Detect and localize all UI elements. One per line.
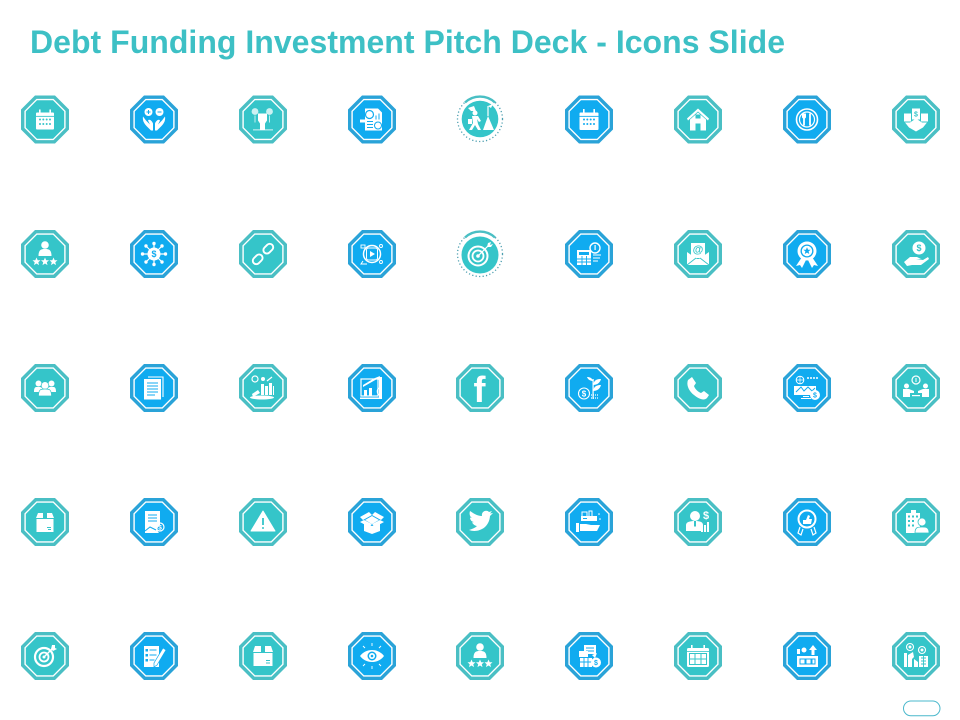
icon: monitor with globe and dollar: $ — [813, 392, 817, 400]
icon: warning triangle — [239, 498, 287, 546]
icon: phone — [674, 364, 722, 412]
icon: facebook — [456, 364, 504, 412]
icon: monitor with globe and dollar — [783, 364, 831, 412]
icon: people with coins — [892, 632, 940, 680]
icon: financial documents with dollar: $ — [594, 660, 598, 667]
icon: documents — [130, 364, 178, 412]
icon: video film reel — [348, 230, 396, 278]
icon: hand with chart — [565, 498, 613, 546]
icon: money handshake: $ — [914, 112, 918, 118]
icon: plant with coin: $ — [582, 390, 587, 398]
icon: box with upward arrows — [783, 632, 831, 680]
icon: chart board with trend arrow — [348, 364, 396, 412]
icon: package box — [239, 632, 287, 680]
icon: calendar — [21, 96, 69, 144]
icon: plant with coin — [565, 364, 613, 412]
icon: email envelope with at sign: @ — [693, 244, 704, 256]
icon: dollar virus network: $ — [151, 249, 157, 259]
icon: businessman with dollar and bars: $ — [703, 510, 709, 522]
icon: twitter bird — [456, 498, 504, 546]
icon: businessman with dollar and bars — [674, 498, 722, 546]
icon: raised fist with balloons — [239, 96, 287, 144]
icon: eye — [348, 632, 396, 680]
icon: calendar grid — [674, 632, 722, 680]
icon: hand holding dollar coin — [892, 230, 940, 278]
icon: house — [674, 96, 722, 144]
icon: group of people — [21, 364, 69, 412]
icon: calendar — [565, 96, 613, 144]
icon: target with arrow — [21, 632, 69, 680]
icon: report with charts — [348, 96, 396, 144]
icon: open box — [348, 498, 396, 546]
icon: award badge with star — [783, 230, 831, 278]
icon: climber on mountain with flags — [458, 96, 502, 142]
icon: growth bars with coin — [239, 364, 287, 412]
icon: cutlery in circle — [783, 96, 831, 144]
icon: calculator and clock — [565, 230, 613, 278]
icon: email envelope with at sign — [674, 230, 722, 278]
icon: money handshake — [892, 96, 940, 144]
icon: document with dollar — [130, 498, 178, 546]
icon: facebook: f — [474, 369, 486, 410]
icon: financial documents with dollar — [565, 632, 613, 680]
icon: package box — [21, 498, 69, 546]
icon: hands with plus and minus — [130, 96, 178, 144]
icon: award badge with thumbs up — [783, 498, 831, 546]
icon: office building with person — [892, 498, 940, 546]
icon: document with dollar: $ — [158, 524, 162, 532]
icon: person with three stars — [456, 632, 504, 680]
icon: meeting with coin — [892, 364, 940, 412]
icon: broken chain link — [239, 230, 287, 278]
icon: person with three stars — [21, 230, 69, 278]
icon: dollar virus network — [130, 230, 178, 278]
icon: target with arrow in circle — [458, 232, 502, 276]
icon: checklist with pen — [130, 632, 178, 680]
title: Debt Funding Investment Pitch Deck - Icons Slide — [30, 24, 785, 60]
icon: hand holding dollar coin: $ — [916, 243, 922, 253]
